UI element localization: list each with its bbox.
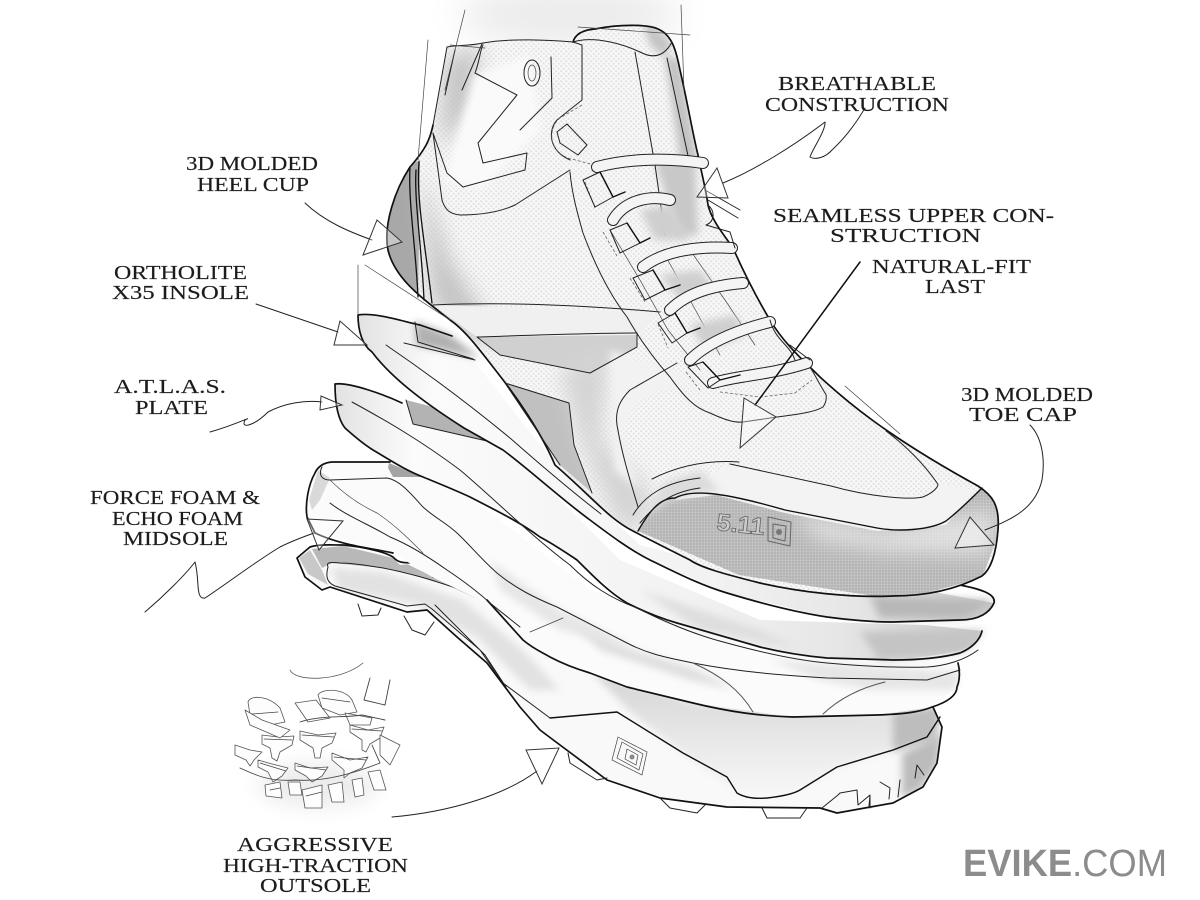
- plate outline: [335, 384, 982, 660]
- arrow: [305, 203, 402, 255]
- outsole shading: [299, 546, 942, 798]
- layer: A.T.L.A.S. plate: [335, 384, 985, 667]
- outsole inner contour: [327, 562, 550, 718]
- midsole outline: [306, 462, 959, 717]
- text: heel cup: HEEL CUP: [197, 174, 309, 196]
- text: 3D MOLDED: [186, 153, 318, 175]
- text: toe cap: TOE CAP: [969, 404, 1077, 426]
- arrow: [210, 396, 342, 432]
- outsole outline: [297, 545, 942, 813]
- mid band lines: [433, 304, 660, 373]
- text: high-traction: HIGH-TRACTION: [223, 855, 408, 877]
- outsole teeth: [822, 765, 924, 808]
- arrow: [697, 108, 865, 198]
- heel cup shade: [388, 160, 420, 292]
- outsole emblem: [612, 737, 647, 775]
- callout: ortholite insole: [114, 262, 367, 345]
- midsole contour lines: [320, 467, 960, 680]
- tread shadow: [258, 763, 378, 807]
- eyelet inner: [528, 65, 536, 81]
- arrow: [256, 304, 367, 345]
- text: plate: PLATE: [135, 397, 208, 419]
- lace bands fill: [597, 160, 807, 383]
- eyestay: [570, 172, 826, 422]
- arrow: [145, 519, 343, 612]
- eyestay stitching: [585, 182, 812, 397]
- pull loop: [557, 124, 587, 155]
- toe cap: [638, 488, 1000, 600]
- outsole lug outlines: [358, 604, 807, 818]
- outsole wall line: [550, 712, 940, 798]
- midsole body: [306, 462, 958, 717]
- text: FORCE FOAM &: [90, 487, 261, 509]
- text: struction: STRUCTION: [830, 225, 981, 247]
- text: 3D MOLDED: [961, 384, 1093, 406]
- outsole body: [297, 545, 942, 813]
- text: ORTHOLITE: [114, 262, 247, 284]
- upper outline: [387, 25, 998, 596]
- arrow: [392, 748, 559, 817]
- layer: boot upper: [358, 5, 1000, 600]
- insole outline: [358, 314, 994, 622]
- callout: midsole: [90, 487, 343, 612]
- logo badge: [768, 517, 791, 546]
- text: last: LAST: [925, 276, 985, 298]
- toe panel: [730, 431, 938, 498]
- arrow: [955, 425, 1043, 548]
- callout: toe cap: [955, 384, 1093, 548]
- insole contour lines: [386, 322, 601, 514]
- text: echo foam: ECHO FOAM: [112, 508, 243, 530]
- toe cap upper rand: [675, 464, 975, 531]
- text: A.T.L.A.S.: [114, 376, 226, 398]
- plate shading: [860, 630, 985, 660]
- tread lug facets: [252, 698, 382, 796]
- layer: midsole: [306, 462, 960, 717]
- text: outsole: OUTSOLE: [260, 875, 371, 897]
- under-lace lines: [610, 230, 755, 370]
- insole body: [358, 314, 994, 622]
- collar eyelet: [524, 60, 540, 86]
- insole forefoot shading: [870, 596, 995, 618]
- tongue lines: [573, 40, 690, 235]
- collar details: [433, 44, 570, 215]
- text: seamless upper: SEAMLESS UPPER CON-: [773, 205, 1054, 227]
- lace shadows: [640, 205, 745, 350]
- callout: heel cup: [186, 153, 402, 255]
- tread edge lines: [240, 678, 390, 780]
- vamp panel: [617, 363, 739, 507]
- insole grey heel area: [415, 321, 480, 358]
- layer: outsole: [297, 545, 942, 818]
- midsole grey notch: [388, 463, 423, 477]
- layer: insole: [358, 314, 995, 622]
- collar shade: [440, 45, 480, 150]
- swoosh lines: [505, 383, 592, 493]
- plate contour lines: [352, 400, 978, 667]
- sketch construction lines: [358, 5, 900, 434]
- callout: atlas plate: [114, 376, 342, 432]
- toe cap top line: [638, 488, 982, 531]
- text: x35 insole: X35 INSOLE: [112, 282, 249, 304]
- text: NATURAL-FIT: [872, 256, 1031, 278]
- tab shadows: [600, 172, 740, 380]
- swoosh shade: [560, 350, 650, 535]
- collar stitching: [552, 105, 598, 166]
- mid band: [433, 305, 660, 337]
- upper body: [387, 25, 998, 596]
- text: construction: CONSTRUCTION: [765, 94, 949, 116]
- plate body: [335, 384, 982, 660]
- text: midsole: MIDSOLE: [123, 528, 228, 550]
- midsole shading: [560, 612, 735, 690]
- callout: breathable construction: [697, 73, 936, 198]
- plate grey patch: [406, 400, 487, 441]
- callout: natural-fit last: [740, 256, 1031, 448]
- tread detail sketch: [235, 663, 400, 808]
- lace bands outlines: [597, 160, 807, 383]
- small arc: [290, 663, 363, 678]
- laces: [583, 160, 810, 388]
- callout: outsole: [237, 748, 559, 856]
- upper shading: [385, 12, 1000, 600]
- logo 5.11: 5.11: [715, 509, 766, 541]
- heel stripes: [410, 162, 432, 303]
- lace tabs: [583, 172, 720, 388]
- tongue shade: [641, 26, 673, 58]
- text: BREATHABLE: [778, 73, 936, 95]
- watermark: EVIKE.COM: EVIKE.COM: [963, 843, 1167, 885]
- text: AGGRESSIVE: [237, 834, 393, 856]
- soft halo behind collar: [460, 0, 680, 50]
- tread lugs: [235, 690, 400, 808]
- arrow: [740, 262, 860, 448]
- side hooks: [705, 190, 810, 360]
